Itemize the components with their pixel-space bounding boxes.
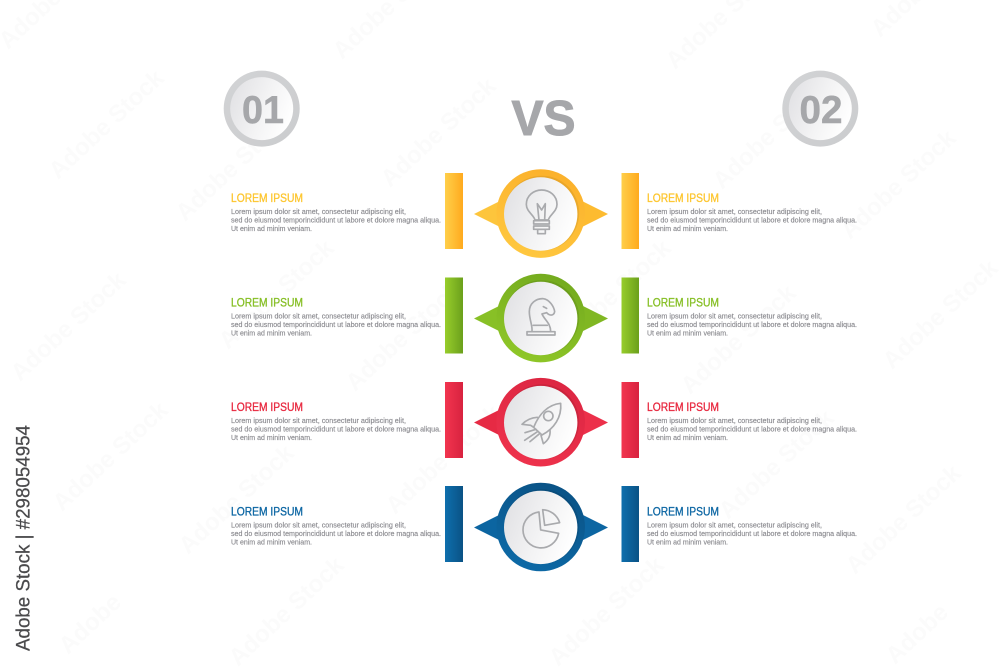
right text block: Lorem ipsum dolor sit amet, consectetur adipiscing elit, bbox=[647, 416, 822, 425]
left text block: Lorem ipsum dolor sit amet, consectetur adipiscing elit, bbox=[231, 312, 406, 320]
left text block bbox=[231, 402, 441, 442]
watermark pattern: Adobe Stock bbox=[676, 279, 802, 399]
badge 01: 01 bbox=[242, 89, 284, 132]
icon: rocket bbox=[522, 403, 561, 444]
left text block: LOREM IPSUM bbox=[231, 298, 303, 310]
right text block: LOREM IPSUM bbox=[647, 298, 719, 310]
left text block: sed do eiusmod temporincididunt ut labore et dolore magna aliqua. bbox=[231, 424, 441, 434]
watermark pattern: Adobe bbox=[54, 589, 127, 659]
watermark pattern: Adobe Stock bbox=[381, 399, 507, 519]
watermark pattern: Adobe Stock bbox=[174, 439, 300, 559]
icon: light bulb bbox=[526, 190, 557, 234]
right text block: LOREM IPSUM bbox=[647, 506, 719, 518]
left text block: sed do eiusmod temporincididunt ut labore et dolore magna aliqua. bbox=[231, 320, 441, 329]
right text block bbox=[647, 402, 857, 442]
icon: chess knight bbox=[527, 299, 555, 335]
right text block: Ut enim ad minim veniam. bbox=[647, 328, 728, 338]
pointers and ring bbox=[474, 483, 608, 571]
badge 02: 02 bbox=[800, 89, 842, 132]
left text block bbox=[231, 506, 441, 546]
right text block: Lorem ipsum dolor sit amet, consectetur adipiscing elit, bbox=[647, 312, 822, 320]
right text block: sed do eiusmod temporincididunt ut labore et dolore magna aliqua. bbox=[647, 424, 857, 434]
pointers and ring bbox=[474, 274, 608, 362]
watermark pattern: Adobe Stock bbox=[714, 404, 840, 524]
right text block: LOREM IPSUM bbox=[647, 402, 719, 414]
watermark pattern: Adobe Stock bbox=[171, 106, 297, 226]
left text block: sed do eiusmod temporincididunt ut labore et dolore magna aliqua. bbox=[231, 529, 441, 538]
left text block: sed do eiusmod temporincididunt ut labore et dolore magna aliqua. bbox=[231, 216, 441, 224]
stock id caption: Adobe Stock | #298054954 bbox=[12, 425, 34, 651]
right bar bbox=[622, 382, 639, 458]
left text block bbox=[231, 193, 441, 233]
right text block: LOREM IPSUM bbox=[647, 193, 719, 205]
right text block bbox=[647, 298, 857, 338]
left bar bbox=[445, 173, 463, 249]
row 1: yellow bbox=[231, 169, 857, 258]
left text block bbox=[231, 298, 441, 338]
left bar bbox=[445, 278, 463, 354]
left text block: Ut enim ad minim veniam. bbox=[231, 433, 312, 442]
watermark pattern: Adobe Stock bbox=[376, 72, 502, 192]
watermark pattern: Adobe Stock bbox=[214, 234, 340, 354]
left text block: LOREM IPSUM bbox=[231, 402, 303, 414]
watermark pattern: Adobe Stock bbox=[551, 234, 677, 354]
row 3: red bbox=[231, 378, 857, 467]
watermark pattern: Adobe Stock bbox=[44, 64, 170, 184]
left text block: Lorem ipsum dolor sit amet, consectetur adipiscing elit, bbox=[231, 207, 406, 216]
right bar bbox=[622, 278, 639, 354]
left text block: Lorem ipsum dolor sit amet, consectetur adipiscing elit, bbox=[231, 520, 406, 530]
left text block: Ut enim ad minim veniam. bbox=[231, 224, 312, 233]
watermark pattern: Adobe Stock bbox=[48, 396, 174, 516]
right text block bbox=[647, 506, 857, 546]
left text block: LOREM IPSUM bbox=[231, 193, 303, 205]
watermark pattern: Adobe Stock bbox=[878, 254, 1000, 374]
left text block: LOREM IPSUM bbox=[231, 506, 303, 518]
right text block: Ut enim ad minim veniam. bbox=[647, 433, 728, 442]
pointers and ring bbox=[474, 169, 608, 258]
icon: pie chart bbox=[523, 510, 560, 548]
left text block: Lorem ipsum dolor sit amet, consectetur adipiscing elit, bbox=[231, 416, 406, 425]
right text block: Ut enim ad minim veniam. bbox=[647, 224, 728, 233]
watermark pattern: Adobe Stock bbox=[836, 124, 962, 244]
right bar bbox=[622, 486, 639, 562]
right text block: Ut enim ad minim veniam. bbox=[647, 538, 728, 546]
row 2: green bbox=[231, 274, 857, 362]
left text block: Ut enim ad minim veniam. bbox=[231, 538, 312, 546]
watermark pattern: Adobe Stock bbox=[841, 459, 967, 579]
watermark pattern: Adobe Stock bbox=[6, 266, 132, 386]
heading: VS: VS bbox=[512, 92, 576, 146]
right text block bbox=[647, 193, 857, 233]
watermark pattern: Adobe Stock bbox=[341, 276, 467, 396]
left bar bbox=[445, 486, 463, 562]
left bar bbox=[445, 382, 463, 458]
right text block: sed do eiusmod temporincididunt ut labore et dolore magna aliqua. bbox=[647, 529, 857, 538]
right text block: Lorem ipsum dolor sit amet, consectetur adipiscing elit, bbox=[647, 520, 822, 530]
row 4: blue bbox=[231, 483, 857, 571]
right bar bbox=[622, 173, 639, 249]
badge 01 bbox=[224, 71, 300, 147]
right text block: Lorem ipsum dolor sit amet, consectetur adipiscing elit, bbox=[647, 207, 822, 216]
watermark pattern: Adobe Stock bbox=[708, 74, 834, 194]
right text block: sed do eiusmod temporincididunt ut labore et dolore magna aliqua. bbox=[647, 216, 857, 224]
badge 02 bbox=[782, 71, 858, 147]
left text block: Ut enim ad minim veniam. bbox=[231, 328, 312, 338]
right text block: sed do eiusmod temporincididunt ut labore et dolore magna aliqua. bbox=[647, 320, 857, 329]
pointers and ring bbox=[474, 378, 608, 467]
